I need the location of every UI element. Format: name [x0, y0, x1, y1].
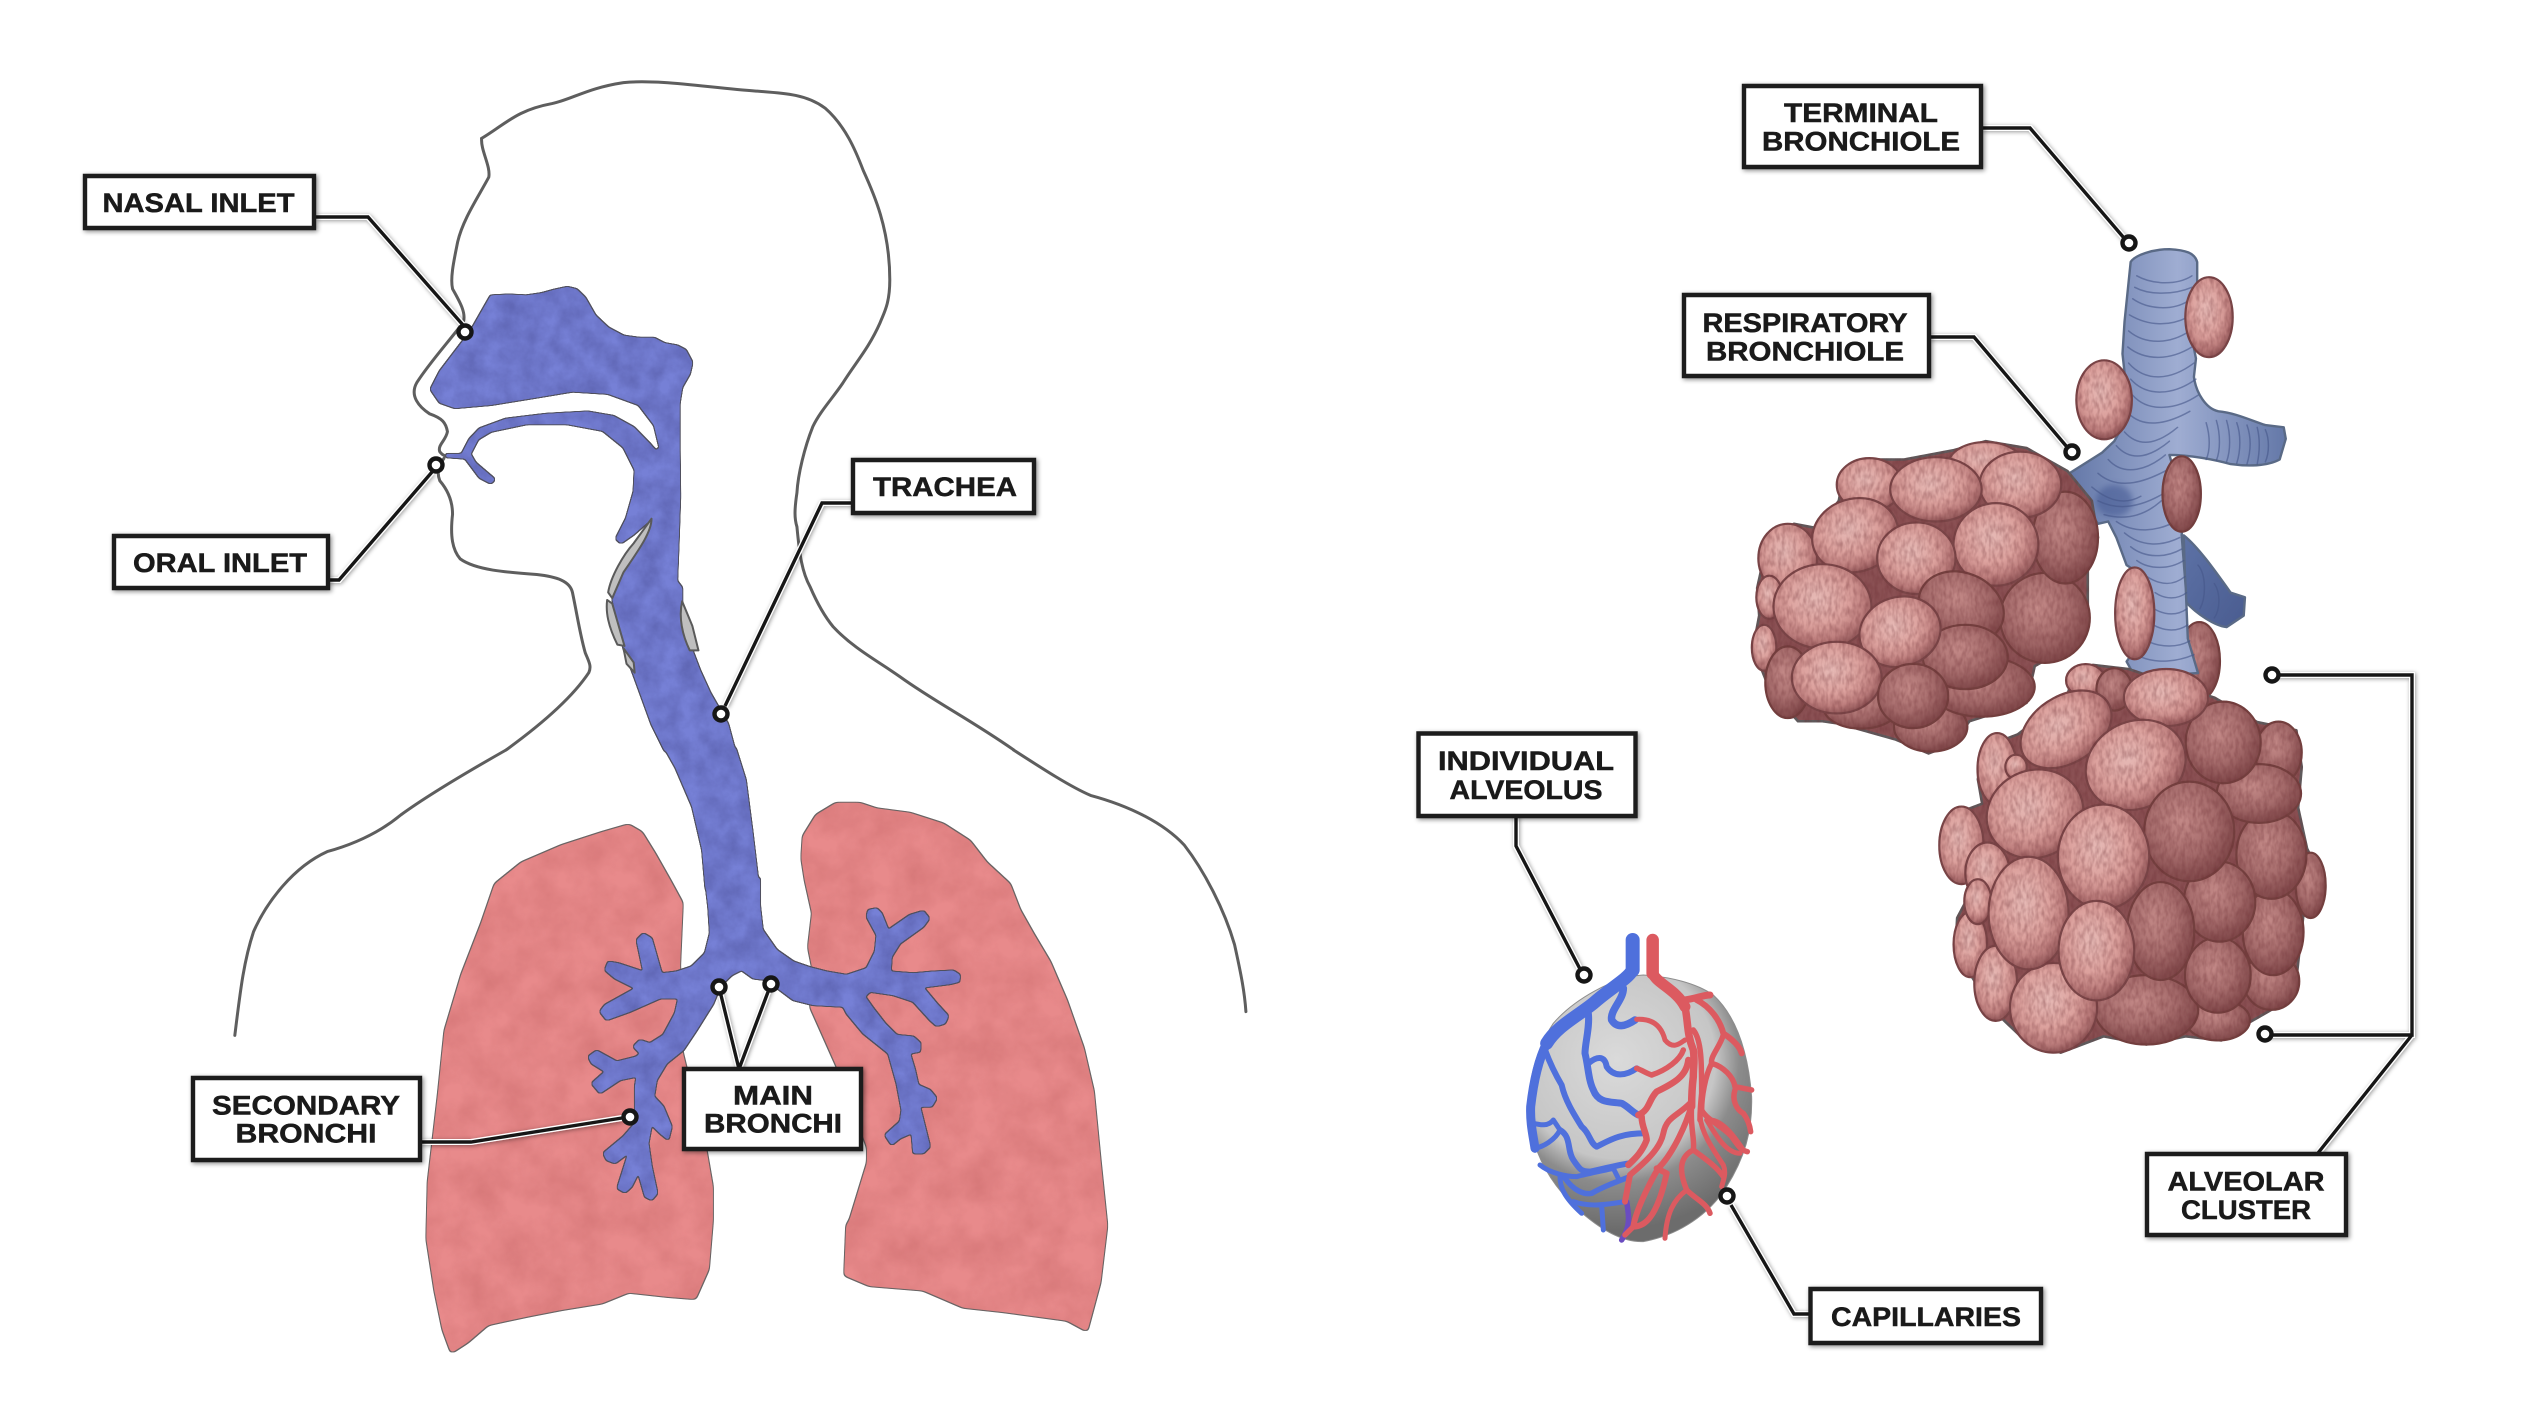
back bubble behind stem — [2179, 622, 2220, 700]
panel: lower alveolar cluster — [1939, 664, 2326, 1053]
tube shadow patch — [2096, 485, 2133, 517]
arterial capillaries — [1625, 940, 1752, 1238]
label: terminal bronchiole: TERMINAL — [1784, 98, 1938, 128]
label: alveolar cluster: CLUSTER — [2181, 1195, 2311, 1225]
label: terminal bronchiole — [1744, 86, 2136, 250]
label: respiratory bronchiole: BRONCHIOLE — [1706, 336, 1904, 366]
upper alveolar cluster — [1752, 441, 2098, 753]
label: main bronchi — [684, 978, 861, 1149]
mid trachea — [665, 748, 759, 888]
label: respiratory bronchiole: RESPIRATORY — [1702, 308, 1908, 338]
label: trachea: TRACHEA — [873, 472, 1017, 502]
panel: terminal bronchiole and upper alveolar cluster — [1752, 249, 2286, 753]
cartilage — [607, 519, 698, 673]
venous capillaries — [1531, 940, 1645, 1230]
label: alveolar cluster: ALVEOLAR — [2168, 1166, 2324, 1196]
label: trachea — [714, 460, 1034, 720]
right lung — [801, 803, 1107, 1332]
label: main bronchi: MAIN — [733, 1080, 813, 1110]
label: capillaries: CAPILLARIES — [1831, 1302, 2021, 1332]
lungs — [426, 803, 1107, 1353]
label: alveolar cluster — [2147, 668, 2412, 1235]
label: oral inlet — [114, 458, 442, 588]
label: nasal inlet: NASAL INLET — [102, 188, 295, 218]
panel: whole-body respiratory tract — [235, 82, 1246, 1353]
label: secondary bronchi: SECONDARY — [212, 1090, 400, 1120]
label: secondary bronchi — [193, 1078, 636, 1160]
upper airway — [431, 287, 735, 751]
head and torso outline — [235, 82, 1246, 1035]
label: terminal bronchiole: BRONCHIOLE — [1762, 126, 1960, 156]
alveolus sphere — [1529, 975, 1752, 1242]
label: respiratory bronchiole — [1684, 295, 2078, 458]
label: individual alveolus: ALVEOLUS — [1450, 775, 1602, 805]
label: oral inlet: ORAL INLET — [133, 548, 308, 578]
airway: nasal cavity, pharynx, trachea and bronchi — [431, 287, 960, 1200]
label: capillaries — [1720, 1190, 2041, 1343]
tube ring hatching — [2092, 276, 2268, 661]
label: individual alveolus: INDIVIDUAL — [1438, 746, 1614, 776]
left lung — [426, 824, 713, 1353]
label: main bronchi: BRONCHI — [704, 1108, 842, 1138]
panel: individual alveolus with capillaries — [1529, 940, 1752, 1242]
small alveoli on tube — [2076, 277, 2233, 659]
label: nasal inlet — [85, 176, 472, 338]
label: secondary bronchi: BRONCHI — [236, 1118, 376, 1148]
bronchiole tube — [2069, 249, 2286, 680]
bronchial tree — [588, 878, 960, 1200]
label: individual alveolus — [1418, 734, 1636, 982]
